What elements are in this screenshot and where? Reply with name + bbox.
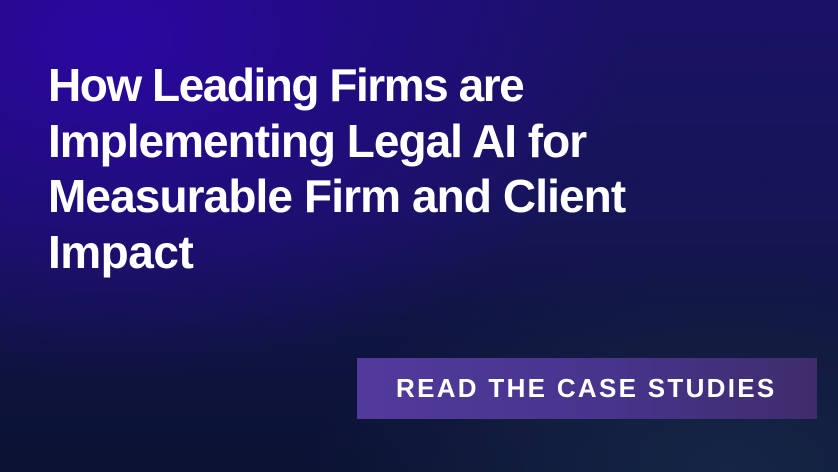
title: Impact: [48, 226, 193, 278]
title: Implementing Legal AI for: [48, 114, 586, 166]
title: How Leading Firms are: [48, 59, 523, 111]
title: Measurable Firm and Client: [48, 170, 625, 222]
button: read the case studies: READ THE CASE STUDIES: [396, 373, 777, 403]
button: read the case studies: [357, 358, 817, 419]
title: [48, 59, 626, 278]
